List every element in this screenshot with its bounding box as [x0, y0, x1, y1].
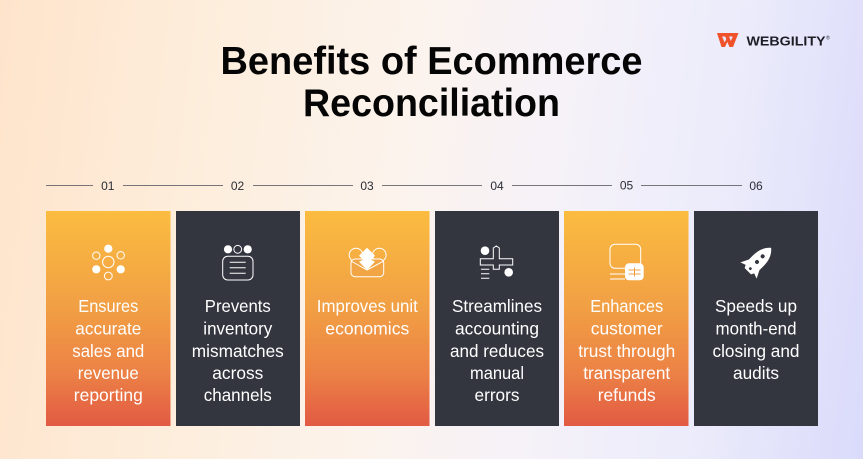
text: card 01: sales and [72, 341, 144, 361]
title: Reconciliation [303, 82, 560, 125]
text: card 02: mismatches [192, 341, 284, 361]
timeline: 04 [490, 179, 504, 193]
text: card 02: Prevents [205, 296, 271, 316]
text: card 06: closing and [712, 341, 800, 361]
timeline: 05 [620, 178, 633, 192]
panel: card 05 [564, 211, 688, 426]
text: card 05: transparent [583, 363, 670, 383]
text: card 04: accounting [455, 318, 539, 338]
text: card 05 [578, 296, 675, 405]
text: card 01: revenue [78, 363, 139, 383]
panel: card 01 [46, 211, 170, 426]
panel: card 02 [176, 211, 300, 426]
text: card 04: Streamlines [452, 296, 542, 316]
text: card 02: across [212, 363, 264, 383]
text: card 03: economics [325, 318, 410, 338]
icon: refund receipt [610, 244, 644, 280]
text: card 01 [72, 296, 144, 405]
logo: Webgility [717, 33, 830, 48]
timeline: 02 [231, 179, 244, 193]
title: Benefits of Ecommerce [220, 40, 642, 83]
text: card 04 [450, 296, 544, 405]
text: card 05: trust through [578, 341, 675, 361]
timeline [46, 178, 763, 193]
text: card 04: and reduces [450, 341, 544, 361]
text: card 05: Enhances [590, 296, 663, 316]
text: card 06: Speeds up [715, 296, 797, 316]
text: card 01: reporting [74, 385, 143, 405]
icon: unit box [349, 248, 386, 277]
logo: Webgility: ® [826, 34, 830, 42]
text: card 02 [192, 296, 284, 405]
text: card 01: accurate [75, 318, 141, 338]
panel: card 04 [435, 211, 559, 426]
text: card 03: Improves unit [317, 296, 418, 316]
text: card 04: manual [470, 363, 524, 383]
title [220, 40, 642, 125]
text: card 02: channels [204, 385, 272, 405]
icon: accounting plus [480, 246, 513, 278]
icon: inventory list [223, 245, 253, 280]
text: card 04: errors [474, 385, 520, 405]
text: card 05: refunds [598, 385, 656, 405]
timeline: 01 [101, 179, 115, 193]
text: card 06: audits [733, 363, 779, 383]
text: card 05: customer [591, 318, 663, 338]
icon: rocket [740, 240, 779, 279]
panel: card 06 [694, 211, 818, 426]
timeline: 03 [360, 179, 374, 193]
panel: card 03 [305, 211, 430, 426]
text: card 02: inventory [203, 318, 273, 338]
logo: Webgility: WEBGILITY [746, 33, 826, 48]
text: card 06: month-end [716, 318, 796, 338]
text: card 01: Ensures [78, 296, 139, 316]
text: card 06 [712, 296, 800, 383]
text: card 03 [317, 296, 418, 338]
timeline: 06 [749, 179, 763, 193]
icon: network circles [92, 245, 125, 280]
